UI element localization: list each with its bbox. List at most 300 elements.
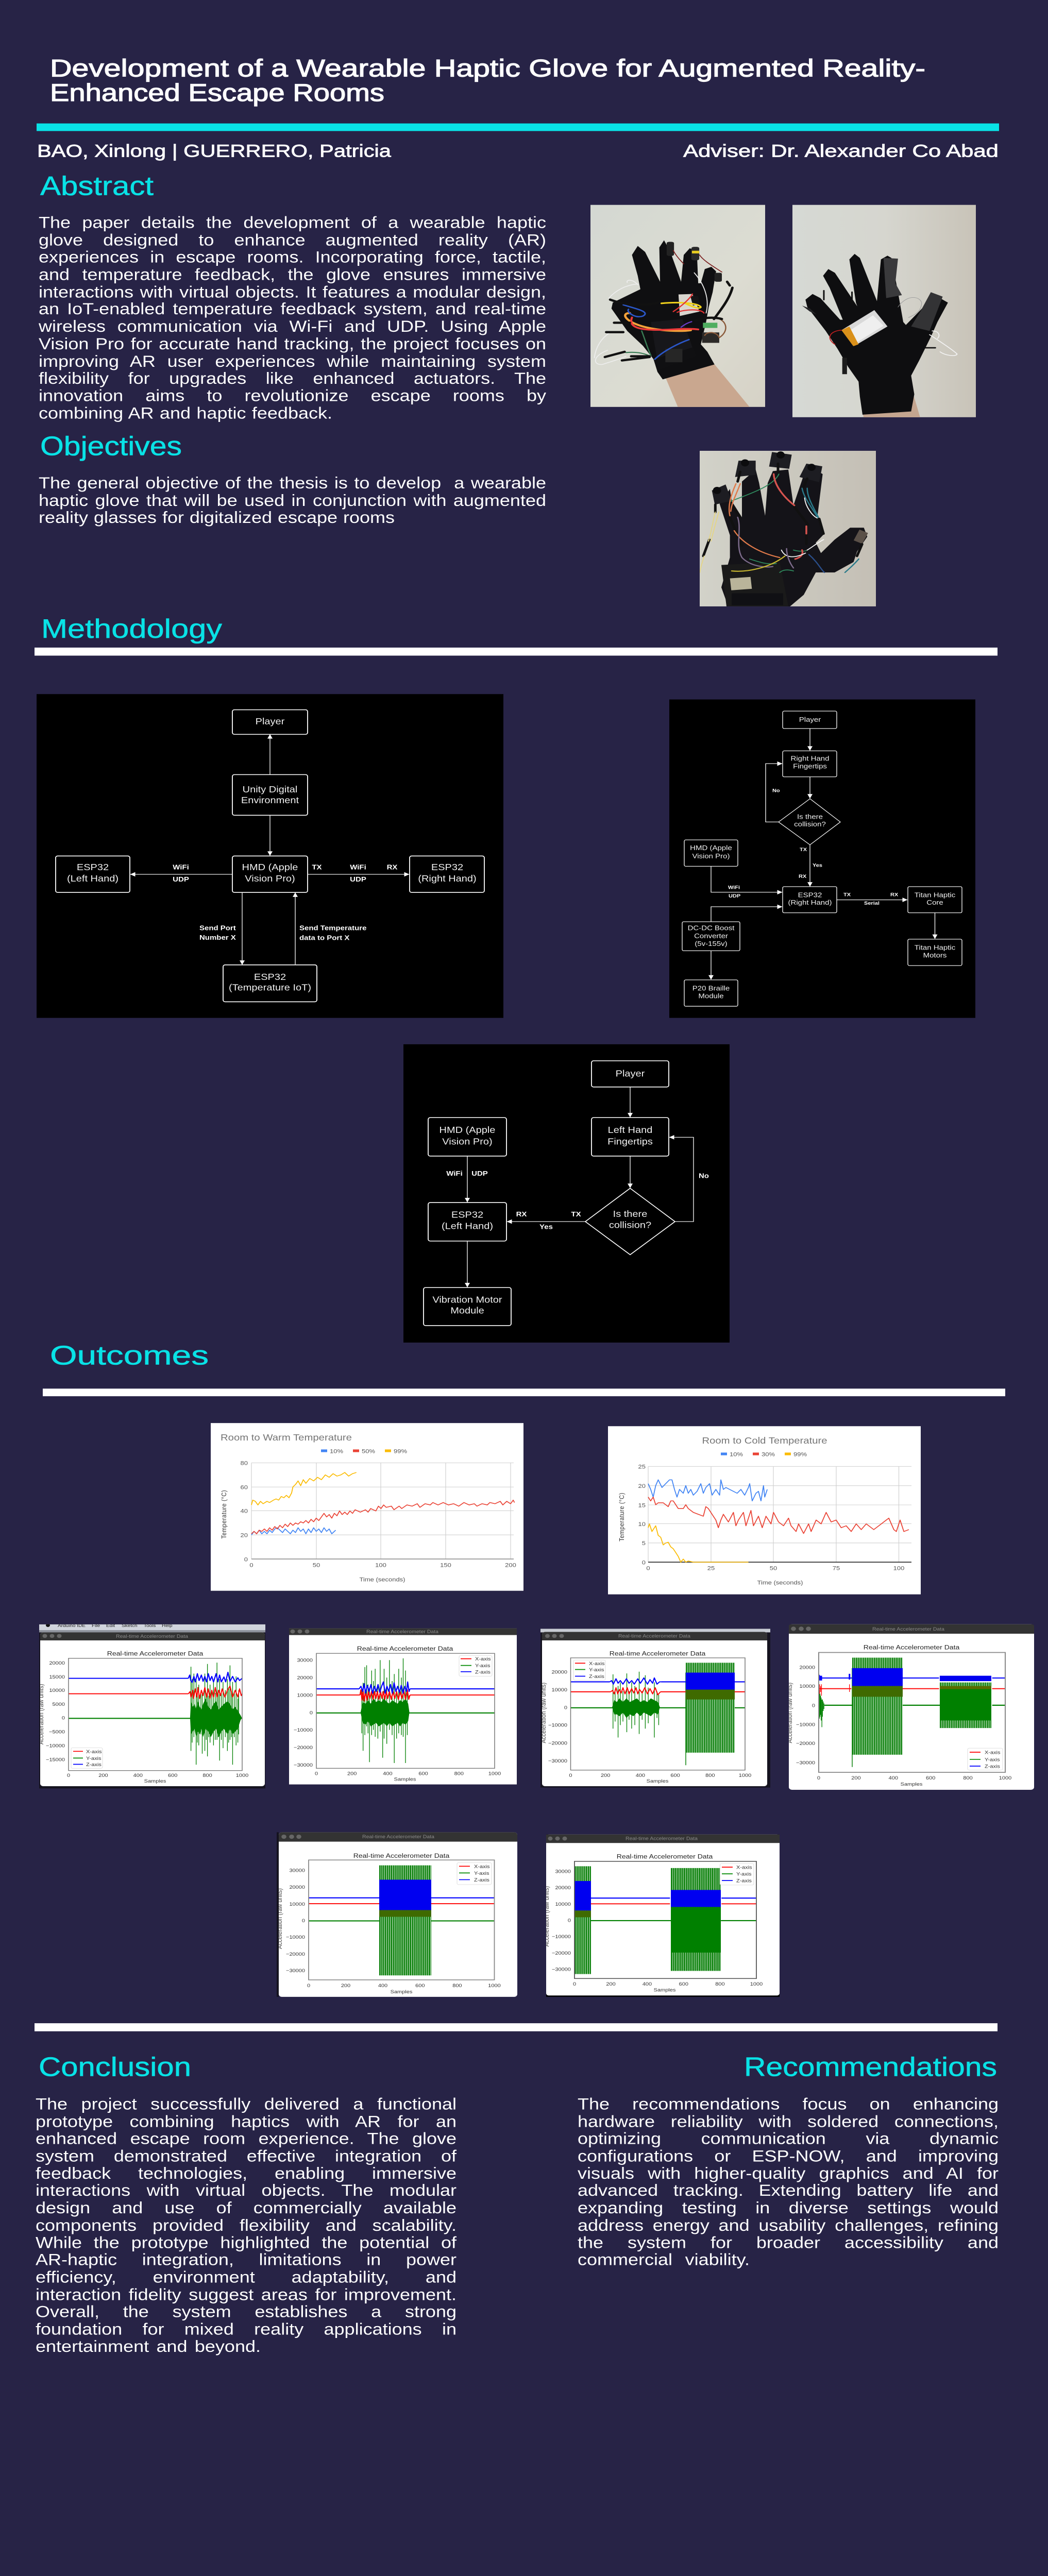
tick labels: 20 xyxy=(241,1532,248,1538)
menu bar strip: Arduino IDE xyxy=(58,1623,86,1628)
diagram: system architecture xyxy=(37,694,503,1018)
tick labels xyxy=(294,1658,313,1768)
tick labels: −15000 xyxy=(46,1757,65,1762)
x ticks: 600 xyxy=(679,1982,688,1987)
menu bar strip: Help xyxy=(162,1623,173,1628)
tick labels: −30000 xyxy=(286,1969,305,1974)
axis labels xyxy=(220,1490,405,1583)
link labels: WiFi xyxy=(173,863,189,871)
chart: accelerometer 2 xyxy=(289,1629,517,1785)
x ticks: 200 xyxy=(347,1771,357,1776)
x ticks: 600 xyxy=(418,1771,428,1776)
text block: conclusion: The project successfully delivered a functional xyxy=(36,2095,457,2113)
data lines xyxy=(648,1480,909,1562)
title divider bar xyxy=(37,124,999,131)
x ticks: 600 xyxy=(168,1773,178,1778)
plot title: Real-time Accelerometer Data xyxy=(617,1853,713,1860)
x ticks: Samples xyxy=(901,1782,922,1787)
box: esp32 right: ESP32 xyxy=(798,891,822,899)
box: hmd xyxy=(232,856,308,892)
title: Development of a Wearable Haptic Glove for Augmented Reality- xyxy=(50,55,925,82)
tick labels: 50 xyxy=(313,1562,320,1568)
tick labels: 20000 xyxy=(799,1665,815,1670)
box: hmd: HMD (Apple xyxy=(242,862,298,872)
box: hmd xyxy=(428,1117,506,1156)
box: braille module: Module xyxy=(698,992,724,999)
link labels: TX xyxy=(312,863,322,871)
title bar xyxy=(279,1832,517,1842)
text block: conclusion: interaction fidelity suggest areas for improvement. xyxy=(36,2285,457,2303)
tick labels: 20000 xyxy=(49,1660,65,1666)
legend: Z-axis xyxy=(475,1670,491,1675)
link labels: TX xyxy=(800,847,807,853)
text block: abstract: and temperature feedback, the glove ensures immersive xyxy=(39,265,546,283)
link labels: data to Port X xyxy=(299,934,350,941)
x ticks xyxy=(67,1773,249,1784)
legend: X-axis xyxy=(474,1864,490,1870)
link labels xyxy=(446,1170,709,1230)
text block: recommendations: address energy and usability challenges, refining xyxy=(578,2216,999,2234)
box: esp32 left xyxy=(56,856,130,892)
tick labels xyxy=(552,1869,571,1972)
box: esp32 temperature: (Temperature IoT) xyxy=(229,982,311,992)
tick labels: 10 xyxy=(638,1521,646,1528)
photo: glove with vibration modules xyxy=(700,451,876,606)
text block: recommendations: optimizing communication via dynamic xyxy=(578,2129,999,2148)
link labels: Serial xyxy=(864,901,880,906)
text block: conclusion: components provided flexibility and scalability. xyxy=(36,2216,457,2234)
x ticks: 400 xyxy=(133,1773,143,1778)
plot traces xyxy=(316,1653,495,1768)
photo: glove palm with battery xyxy=(792,205,976,418)
chart: accelerometer 5 xyxy=(276,1832,517,1997)
tick labels: 15 xyxy=(638,1502,646,1509)
window xyxy=(542,1632,767,1786)
text block: recommendations: commercial viability. xyxy=(578,2250,750,2269)
text block: objectives: The general objective of the thesis is to develop a wearable xyxy=(39,473,546,492)
tick labels: 15000 xyxy=(49,1674,65,1680)
box: boost converter: (5v-155v) xyxy=(695,940,728,947)
tick labels: −30000 xyxy=(796,1760,815,1766)
box: esp32 left: (Left Hand) xyxy=(67,873,119,884)
x ticks: 200 xyxy=(606,1982,616,1987)
text block: recommendations: configurations or ESP-NOW, and improving xyxy=(578,2147,999,2165)
legend xyxy=(573,1660,605,1680)
text block: recommendations: The recommendations focus on enhancing xyxy=(578,2095,999,2113)
link labels: RX xyxy=(387,863,398,871)
box: esp32 temperature xyxy=(223,965,317,1002)
text block: abstract: an IoT-enabled temperature feedback system, and real-time xyxy=(39,300,546,318)
text block: conclusion: prototype combining haptics with AR for an xyxy=(36,2112,457,2130)
title bar xyxy=(542,1632,767,1640)
text block: abstract: interactions with virtual objects. It features a modular design, xyxy=(39,282,546,301)
box: right hand fingertips: Right Hand xyxy=(791,755,829,762)
tick labels: 10000 xyxy=(551,1688,567,1693)
tick labels: 0 xyxy=(564,1705,567,1710)
heading: methodology: Methodology xyxy=(41,614,222,643)
axis labels: Time (seconds) xyxy=(360,1576,405,1583)
legend xyxy=(457,1862,492,1885)
text block: conclusion: AR-haptic integration, limitations in power xyxy=(36,2250,457,2269)
chart: accelerometer 4 xyxy=(786,1624,1034,1790)
box: esp32 left: (Left Hand) xyxy=(442,1221,493,1231)
x ticks: 1000 xyxy=(750,1982,763,1987)
x ticks: 0 xyxy=(315,1771,318,1776)
text block: conclusion: foundation for mixed reality applications in xyxy=(36,2320,457,2338)
tick labels: −10000 xyxy=(796,1722,815,1727)
tick labels: 30000 xyxy=(555,1869,571,1874)
text block: conclusion: entertainment and beyond. xyxy=(36,2337,261,2355)
link labels: WiFi xyxy=(446,1170,463,1177)
tick labels: −30000 xyxy=(552,1967,571,1972)
chart title: Room to Warm Temperature xyxy=(221,1432,352,1443)
tick labels: 60 xyxy=(241,1484,248,1490)
link labels: TX xyxy=(843,892,851,897)
x ticks: 0 xyxy=(307,1983,310,1989)
box: esp32 temperature: ESP32 xyxy=(254,972,286,982)
y axis label: Acceleration (raw units) xyxy=(543,1886,550,1946)
title: Enhanced Escape Rooms xyxy=(50,79,384,106)
title bar xyxy=(289,1629,517,1635)
tick labels: 10000 xyxy=(799,1684,815,1689)
tick labels xyxy=(638,1463,905,1572)
heading: conclusion: Conclusion xyxy=(39,2052,191,2082)
tick labels: 150 xyxy=(440,1562,451,1568)
decision: collision xyxy=(779,799,840,845)
plot title: Real-time Accelerometer Data xyxy=(107,1650,204,1657)
box: boost converter xyxy=(682,922,740,951)
text block: abstract: experiences in escape rooms. Incorporating force, tactile, xyxy=(39,248,546,266)
link labels: No xyxy=(699,1172,709,1179)
box: braille module: P20 Braille xyxy=(692,985,730,992)
legend: X-axis xyxy=(589,1661,605,1667)
title bar: Real-time Accelerometer Data xyxy=(618,1634,691,1639)
x ticks: 200 xyxy=(601,1773,611,1778)
text block: recommendations: visuals with higher-quality graphics and AI for xyxy=(578,2164,999,2182)
text block: conclusion: While the prototype highlighted the potential of xyxy=(36,2233,457,2251)
chart: room to warm temperature xyxy=(211,1423,523,1591)
box: boost converter: Converter xyxy=(694,932,728,940)
x ticks: 800 xyxy=(963,1776,973,1781)
x ticks: Samples xyxy=(144,1779,166,1784)
tick labels xyxy=(241,1460,516,1568)
chart: accelerometer 1 xyxy=(37,1623,265,1788)
box: hmd: Vision Pro) xyxy=(442,1137,493,1146)
tick labels: 10000 xyxy=(297,1693,313,1698)
text block: conclusion: system demonstrated effective integration of xyxy=(36,2147,457,2165)
text block: abstract: The paper details the development of a wearable haptic xyxy=(39,213,546,232)
box: right hand fingertips xyxy=(783,751,837,777)
plot title: Real-time Accelerometer Data xyxy=(610,1650,706,1657)
x ticks: 1000 xyxy=(739,1773,752,1778)
tick labels: −30000 xyxy=(294,1762,313,1768)
window xyxy=(279,1832,517,1997)
tick labels: 10000 xyxy=(49,1688,65,1693)
legend: Z-axis xyxy=(86,1762,102,1768)
adviser: Adviser: Dr. Alexander Co Abad xyxy=(683,141,999,161)
heading: outcomes: Outcomes xyxy=(50,1340,209,1370)
tick labels: 20000 xyxy=(297,1675,313,1681)
plot traces xyxy=(69,1658,242,1771)
title bar xyxy=(40,1632,265,1640)
legend: Y-axis xyxy=(985,1757,1000,1762)
axis labels: Time (seconds) xyxy=(757,1579,803,1586)
decision: collision: collision? xyxy=(794,820,826,828)
axis labels: Temperature (°C) xyxy=(618,1493,626,1541)
title bar: Real-time Accelerometer Data xyxy=(872,1627,945,1632)
tick labels: −10000 xyxy=(548,1723,567,1728)
text block: abstract: innovation aims to revolutionize escape rooms by xyxy=(39,386,546,404)
tick labels: 40 xyxy=(241,1507,248,1514)
tick labels: 5000 xyxy=(53,1702,65,1707)
text block: conclusion: feedback technologies, enabling immersive xyxy=(36,2164,457,2182)
x ticks xyxy=(817,1776,1012,1787)
x ticks: 1000 xyxy=(236,1773,249,1778)
heading: abstract: Abstract xyxy=(40,171,154,201)
y axis label: Acceleration (raw units) xyxy=(37,1684,45,1744)
y axis label: Acceleration (raw units) xyxy=(276,1888,283,1949)
decision: collision xyxy=(585,1188,675,1255)
box: esp32 right: (Right Hand) xyxy=(418,873,477,884)
decision: collision: Is there xyxy=(797,812,823,820)
chart: room to cold temperature xyxy=(608,1426,921,1595)
legend: 99% xyxy=(394,1448,407,1454)
box: titan motors: Titan Haptic xyxy=(915,944,955,952)
x ticks xyxy=(315,1771,501,1782)
x ticks: 200 xyxy=(98,1773,108,1778)
legend: Z-axis xyxy=(589,1674,604,1680)
methodology divider xyxy=(35,648,998,656)
tick labels: −10000 xyxy=(294,1728,313,1733)
box: hmd xyxy=(684,840,738,866)
menu bar strip: Edit xyxy=(106,1623,115,1628)
box: unity: Environment xyxy=(241,795,299,805)
title bar xyxy=(789,1624,1034,1634)
link labels: RX xyxy=(516,1210,527,1218)
x ticks: 0 xyxy=(817,1776,820,1781)
box: hmd: HMD (Apple xyxy=(440,1125,495,1134)
tick labels: 5 xyxy=(642,1540,646,1547)
box: esp32 right: ESP32 xyxy=(431,862,463,872)
arrows xyxy=(467,1087,694,1287)
plot traces xyxy=(571,1658,745,1770)
tick labels: 200 xyxy=(505,1562,516,1568)
tick labels: −10000 xyxy=(286,1935,305,1940)
chart: accelerometer 3 xyxy=(539,1629,770,1788)
y axis label: Acceleration (raw units) xyxy=(786,1683,793,1743)
link labels: Yes xyxy=(539,1223,553,1230)
plot title: Real-time Accelerometer Data xyxy=(357,1645,453,1652)
legend: Z-axis xyxy=(736,1878,752,1884)
plot traces xyxy=(574,1861,756,1978)
box: titan core: Titan Haptic xyxy=(915,891,955,899)
arrows xyxy=(130,734,409,964)
text block: conclusion: interactions with virtual objects. The modular xyxy=(36,2181,457,2199)
x ticks: 800 xyxy=(454,1771,464,1776)
box: player: Player xyxy=(616,1069,645,1078)
legend: Z-axis xyxy=(474,1877,489,1883)
x ticks: 0 xyxy=(573,1982,576,1987)
box: titan motors: Motors xyxy=(923,951,946,959)
x ticks: 1000 xyxy=(488,1771,501,1776)
box: unity: Unity Digital xyxy=(243,784,297,794)
text block: conclusion: Overall, the system establishes a strong xyxy=(36,2302,457,2321)
text block: abstract: glove designed to enhance augmented reality (AR) xyxy=(39,231,546,249)
link labels: TX xyxy=(571,1210,581,1218)
x ticks xyxy=(573,1982,763,1993)
text block: recommendations: the system for broader accessibility and xyxy=(578,2233,999,2251)
tick labels: 0 xyxy=(310,1710,313,1716)
tick labels: −10000 xyxy=(46,1743,65,1749)
legend xyxy=(71,1748,103,1768)
decision: collision: collision? xyxy=(609,1220,651,1230)
link labels xyxy=(728,788,898,906)
text block: abstract: wireless communication via Wi-Fi and UDP. Using Apple xyxy=(39,317,546,335)
y axis label: Acceleration (raw units) xyxy=(539,1683,547,1743)
tick labels: 0 xyxy=(568,1918,571,1923)
legend xyxy=(721,1451,807,1458)
link labels: UDP xyxy=(173,875,189,883)
chart title: Room to Cold Temperature xyxy=(702,1435,827,1446)
plot traces xyxy=(819,1652,1005,1772)
legend: Y-axis xyxy=(474,1871,489,1876)
x ticks: 800 xyxy=(715,1982,725,1987)
decision: collision: Is there xyxy=(613,1209,647,1219)
tick labels: −30000 xyxy=(548,1759,567,1764)
legend: 10% xyxy=(330,1448,343,1454)
x ticks: 200 xyxy=(851,1776,861,1781)
tick labels xyxy=(548,1670,567,1764)
tick labels: 10000 xyxy=(555,1902,571,1907)
legend: X-axis xyxy=(475,1657,491,1662)
tick labels: 50 xyxy=(770,1565,777,1572)
box: player xyxy=(232,710,308,734)
x ticks: Samples xyxy=(654,1988,675,1993)
link labels: Send Port xyxy=(199,924,236,931)
title bar: Real-time Accelerometer Data xyxy=(366,1630,439,1635)
link labels: RX xyxy=(890,892,898,897)
x ticks: Samples xyxy=(394,1777,416,1782)
tick labels: 0 xyxy=(249,1562,253,1568)
x ticks: 600 xyxy=(670,1773,680,1778)
diagram: right hand flow xyxy=(669,700,975,1018)
link labels: WiFi xyxy=(728,885,740,890)
grid xyxy=(648,1466,911,1562)
x ticks: 400 xyxy=(378,1983,387,1989)
tick labels: 20000 xyxy=(289,1885,305,1890)
box: right hand fingertips: Fingertips xyxy=(793,762,827,770)
box: hmd: Vision Pro) xyxy=(692,852,730,860)
conclusions divider xyxy=(35,2023,998,2031)
tick labels: −20000 xyxy=(286,1952,305,1957)
authors: BAO, Xinlong | GUERRERO, Patricia xyxy=(37,141,391,161)
axis labels: Temperature (°C) xyxy=(220,1490,228,1539)
x ticks: 200 xyxy=(341,1983,350,1989)
box: vibration motor: Module xyxy=(450,1306,484,1315)
tick labels: 20 xyxy=(638,1483,646,1489)
x ticks: 400 xyxy=(636,1773,645,1778)
tick labels: 0 xyxy=(642,1559,646,1566)
box: titan motors xyxy=(908,939,962,965)
link labels: Yes xyxy=(813,863,822,868)
data lines xyxy=(251,1472,515,1535)
legend: X-axis xyxy=(985,1750,1001,1755)
box: left hand fingertips: Left Hand xyxy=(608,1125,652,1134)
tick labels: 0 xyxy=(302,1918,305,1924)
x ticks xyxy=(307,1983,501,1995)
title bar: Real-time Accelerometer Data xyxy=(362,1835,435,1840)
window xyxy=(546,1835,780,1995)
x ticks: Samples xyxy=(391,1990,412,1995)
link labels: RX xyxy=(799,874,806,879)
heading: objectives: Objectives xyxy=(40,431,182,461)
text block: abstract xyxy=(39,213,546,422)
text block: conclusion: enhanced escape room experience. The glove xyxy=(36,2129,457,2148)
heading: recommendations: Recommendations xyxy=(744,2052,997,2082)
text block: recommendations: advanced tracking. Extending battery life and xyxy=(578,2181,999,2199)
tick labels: −20000 xyxy=(548,1741,567,1746)
box: left hand fingertips: Fingertips xyxy=(607,1137,653,1146)
text block: abstract: Vision Pro for accurate hand tracking, the project focuses on xyxy=(39,334,546,353)
tick labels: 0 xyxy=(812,1703,815,1708)
title bar: Real-time Accelerometer Data xyxy=(626,1836,698,1841)
text block: conclusion xyxy=(36,2095,457,2355)
legend: X-axis xyxy=(736,1865,752,1870)
plot traces xyxy=(309,1860,495,1980)
text block: conclusion: efficiency, environment adaptability, and xyxy=(36,2268,457,2286)
tick labels xyxy=(46,1660,65,1762)
tick labels: 100 xyxy=(375,1562,386,1568)
box: esp32 left: ESP32 xyxy=(451,1210,483,1219)
x ticks: 0 xyxy=(67,1773,70,1778)
x ticks: 600 xyxy=(926,1776,936,1781)
box: titan core xyxy=(908,887,962,913)
menu bar strip: Tools xyxy=(144,1623,156,1628)
link labels: UDP xyxy=(471,1170,488,1177)
tick labels: −10000 xyxy=(552,1935,571,1940)
text block: objectives: haptic glove that will be used in conjunction with augmented xyxy=(39,491,546,509)
text block: conclusion: design and use of commercially available xyxy=(36,2198,457,2217)
tick labels: 20000 xyxy=(551,1670,567,1675)
legend xyxy=(968,1748,1003,1770)
link labels xyxy=(173,863,398,941)
photo: wired glove back xyxy=(590,205,765,409)
legend xyxy=(720,1863,754,1885)
link labels: WiFi xyxy=(350,863,366,871)
menu bar strip: File xyxy=(92,1623,100,1628)
x ticks: 1000 xyxy=(999,1776,1012,1781)
text block: objectives: reality glasses for digitalized escape rooms xyxy=(39,508,395,527)
legend: 50% xyxy=(362,1448,375,1454)
tick labels: 10000 xyxy=(289,1902,305,1907)
menu bar strip: Sketch xyxy=(122,1623,138,1628)
text block: recommendations xyxy=(578,2095,999,2269)
box: left hand fingertips xyxy=(591,1117,669,1156)
text block: recommendations: expanding testing in diverse settings would xyxy=(578,2198,999,2217)
legend: 99% xyxy=(793,1451,807,1458)
diagram: left hand flow xyxy=(403,1044,730,1343)
title bar: Real-time Accelerometer Data xyxy=(116,1634,189,1639)
box: esp32 right xyxy=(410,856,484,892)
tick labels: 30000 xyxy=(289,1868,305,1873)
outcomes divider xyxy=(43,1388,1005,1396)
tick labels xyxy=(286,1868,305,1974)
tick labels: 25 xyxy=(638,1463,646,1470)
x ticks: 1000 xyxy=(488,1983,501,1989)
legend: X-axis xyxy=(86,1749,102,1755)
legend: Y-axis xyxy=(475,1664,491,1669)
legend: Y-axis xyxy=(736,1872,752,1877)
